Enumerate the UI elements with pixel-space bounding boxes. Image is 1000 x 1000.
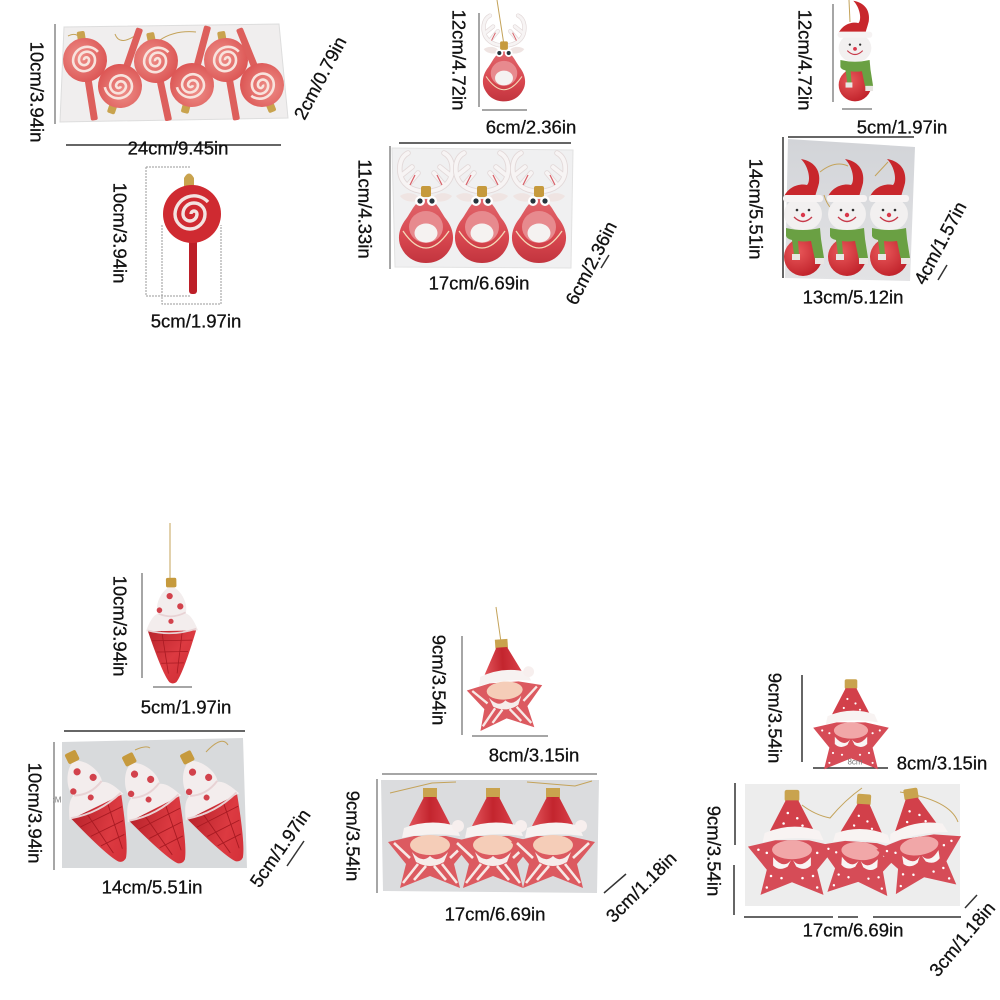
box depth label: 3cm/1.18in: [602, 848, 680, 926]
single lollipop ornament: [146, 167, 221, 304]
reindeer box: [392, 148, 573, 268]
box width label: 24cm/9.45in: [128, 138, 228, 158]
single width label: 5cm/1.97in: [857, 116, 947, 138]
box depth label: 4cm/1.57in: [909, 198, 971, 288]
single height label: 12cm/4.72in: [448, 10, 470, 110]
single height label: 10cm/3.94in: [110, 183, 130, 283]
artifact mark: 8cm: [847, 758, 863, 766]
single width label: 8cm/3.15in: [489, 744, 579, 766]
artifact mark: :M: [53, 796, 62, 804]
box width label: 17cm/6.69in: [803, 920, 903, 940]
single height label: 9cm/3.54in: [764, 673, 786, 763]
single star ornament: [813, 679, 889, 769]
box height label: 10cm/3.94in: [24, 763, 46, 863]
star box: [381, 780, 599, 893]
single height label: 12cm/4.72in: [794, 10, 816, 110]
snowman box: [783, 139, 915, 281]
single height label: 10cm/3.94in: [110, 576, 130, 676]
ice cream box: [43, 738, 267, 876]
box height label: 10cm/3.94in: [26, 42, 48, 142]
box height label: 9cm/3.54in: [342, 791, 364, 881]
box width label: 13cm/5.12in: [803, 286, 903, 308]
single height label: 9cm/3.54in: [428, 635, 450, 725]
single width label: 8cm/3.15in: [897, 752, 987, 774]
panel: reindeer ornaments: [354, 0, 621, 308]
box height label: 14cm/5.51in: [746, 159, 766, 259]
box depth label: 6cm/2.36in: [561, 218, 621, 308]
single ice cream ornament: [145, 523, 199, 684]
panel: striped Santa star ornaments: [342, 607, 680, 926]
box height label: 11cm/4.33in: [354, 159, 376, 259]
box width label: 14cm/5.51in: [102, 876, 202, 898]
single width label: 5cm/1.97in: [151, 310, 241, 332]
lollipop box: [59, 20, 293, 125]
panel: snowman ornaments: [746, 0, 971, 308]
box height label: 9cm/3.54in: [704, 806, 724, 896]
box depth label: 5cm/1.97in: [245, 805, 315, 891]
single width label: 6cm/2.36in: [486, 116, 576, 138]
box depth label: 2cm/0.79in: [289, 33, 351, 123]
box width label: 17cm/6.69in: [445, 904, 545, 924]
box width label: 17cm/6.69in: [429, 272, 529, 294]
single star ornament: [463, 607, 545, 732]
box depth label: 3cm/1.18in: [925, 898, 999, 980]
panel: dotted Santa star ornaments: [704, 673, 999, 980]
single width label: 5cm/1.97in: [141, 696, 231, 718]
panel: lollipop ornaments: [26, 20, 351, 332]
panel: ice cream ornaments: [24, 523, 315, 898]
single snowman ornament: [838, 0, 873, 101]
single reindeer ornament: [483, 0, 525, 101]
star box: [745, 782, 968, 906]
